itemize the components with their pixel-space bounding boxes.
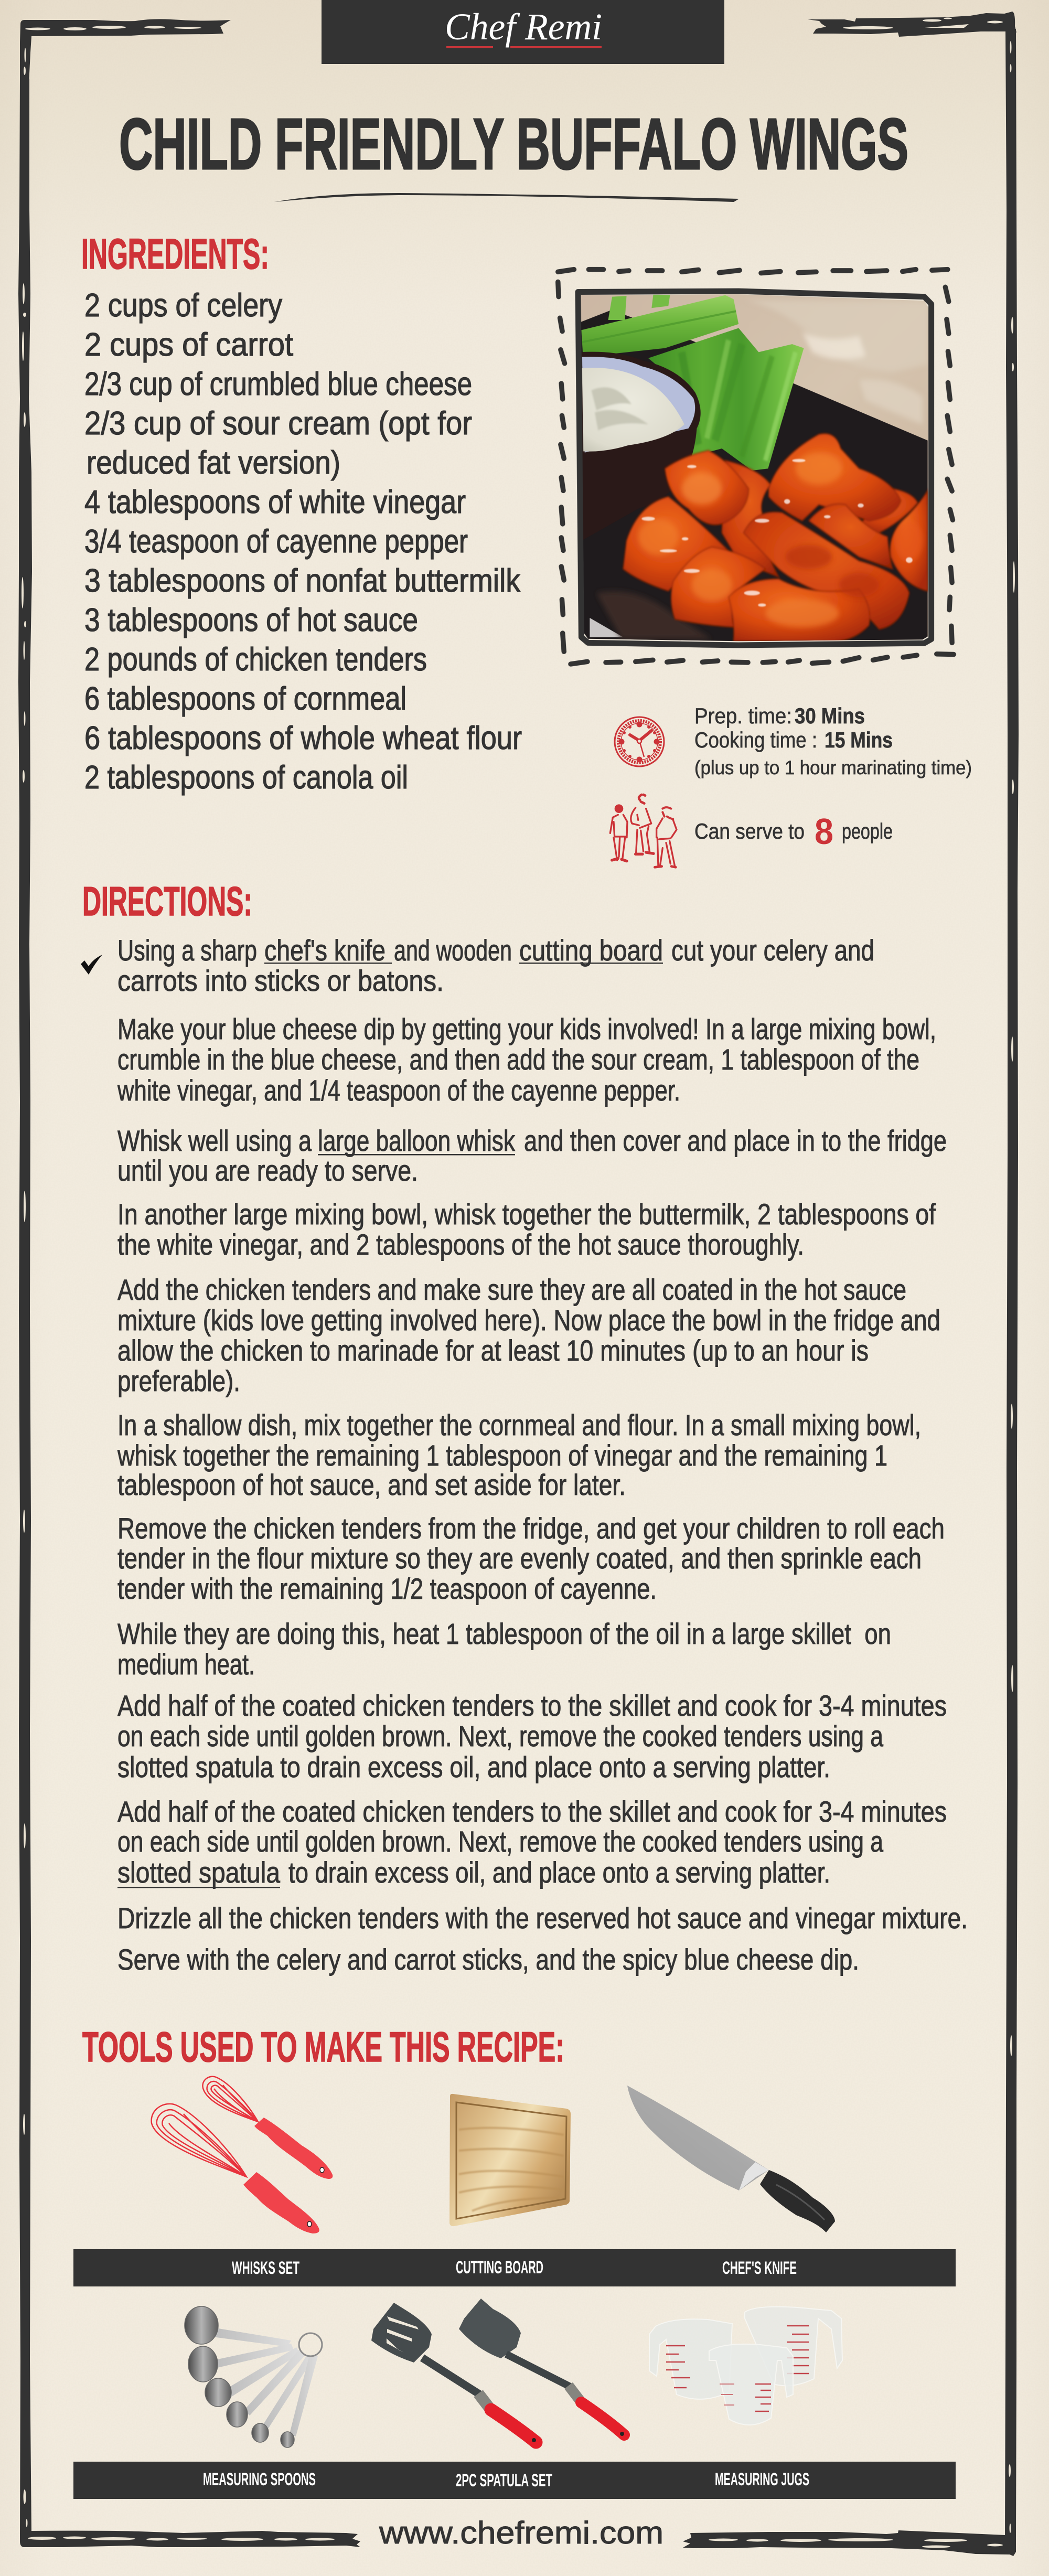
step: whisk: until you are ready to serve. [117,1154,418,1187]
wing: middle back [809,504,893,569]
dip bowl [580,352,701,541]
ingredients list: 3 tablespoons of hot sauce [84,602,418,638]
icon: check mark [81,955,102,975]
label bar: tools row two [73,2462,956,2499]
whisk one [202,2077,333,2179]
whisk two [152,2104,319,2233]
step: cut vegetables: chef's knife [264,934,386,967]
ingredients list [84,287,522,796]
solid spatula [459,2299,624,2436]
info: servings [610,795,893,867]
step: coating mix [117,1408,921,1501]
slotted spatula [371,2303,536,2442]
step: heat oil: While they are doing this, heat 1 tablespoon of the oil in a large skillet on [117,1617,891,1650]
tool: chef's knife [627,2086,835,2232]
ingredients list: 2 cups of carrot [84,327,293,363]
step: coating mix: tablespoon of hot sauce, and set aside for later. [117,1468,626,1501]
step: cut vegetables: carrots into sticks or batons. [117,964,444,997]
prep minutes: 30 Mins [795,703,865,728]
step: buttermilk [117,1198,936,1261]
wing: front bottom [729,579,870,642]
wing: left [623,497,729,591]
photo: buffalo wings with celery and dip [558,270,954,664]
step: coating mix: whisk together the remaining 1 tablespoon of vinegar and the remaining 1 [117,1439,887,1472]
dashed hand-drawn outline [558,270,954,664]
jug left [649,2319,732,2399]
label: spatula set: 2PC SPATULA SET [456,2471,552,2491]
wing: long drumette [744,512,909,629]
wings [623,434,928,642]
people word: people [842,819,893,843]
ingredients list: 2 cups of celery [84,287,282,324]
wing: back pieces [722,461,779,577]
step: cut vegetables: cut your celery and [671,934,874,967]
plate [581,310,928,643]
cooking time: Cooking time : [694,728,817,752]
border: right line [1005,29,1019,2539]
serves number: 8 [815,811,833,852]
marinating note: (plus up to 1 hour marinating time) [694,757,972,778]
logo text: Chef Remi: Chef Remi [445,6,602,48]
border: top-left stroke [20,19,231,84]
ingredients list: 4 tablespoons of white vinegar [84,484,466,520]
icon: three people [610,795,677,867]
dip [582,368,684,452]
step: cut vegetables: Using a sharp [117,934,257,967]
logo banner [322,0,724,64]
ingredients list: reduced fat version) [87,445,340,481]
step: blue cheese dip [117,1012,936,1107]
step: serve: Serve with the celery and carrot sticks, and the spicy blue cheese dip. [117,1943,859,1976]
step: whisk: Whisk well using a [117,1124,312,1157]
ingredients list: 6 tablespoons of cornmeal [84,681,406,717]
glaze highlights [641,459,913,607]
tool: measuring jugs [649,2307,842,2425]
step: heat oil: medium heat. [117,1648,255,1681]
step: marinate: preferable). [117,1364,240,1397]
logo underline [446,46,602,48]
tool: cutting board [449,2094,571,2226]
step: cook first half [117,1689,947,1783]
spoon handles [212,2328,318,2436]
cooking minutes: 15 Mins [825,728,893,752]
step: whisk: and then cover and place in to the fridge [524,1124,947,1157]
heading: tools: TOOLS USED TO MAKE THIS RECIPE: [82,2024,564,2071]
directions text [117,934,968,1976]
tool: spatula set [371,2299,624,2442]
title swash underline [274,193,739,202]
step: heat oil [117,1617,891,1681]
wing mottling [638,453,923,627]
spoon ring [299,2333,322,2356]
ingredients list: 3/4 teaspoon of cayenne pepper [84,523,468,560]
step: cook second half: slotted spatula [117,1856,281,1889]
ingredients list: 2/3 cup of sour cream (opt for [84,405,472,442]
jug back right [745,2307,842,2386]
border: bottom-left stroke [20,2531,360,2547]
ingredients list: 3 tablespoons of nonfat buttermilk [84,563,521,599]
step: cut vegetables: and wooden [394,934,512,967]
heading: ingredients: INGREDIENTS: [81,230,269,278]
step: buttermilk: the white vinegar, and 2 tablespoons of the hot sauce thoroughly. [117,1228,804,1261]
label: chef's knife: CHEF'S KNIFE [722,2258,797,2278]
tool: measuring spoons [185,2306,322,2447]
step: cook first half: slotted spatula to drain excess oil, and place onto a serving platter. [117,1750,830,1783]
step: whisk: large balloon whisk [318,1124,516,1157]
border: left line [18,79,32,2534]
label: measuring spoons: MEASURING SPOONS [203,2470,316,2489]
jug front [709,2344,793,2425]
wing: right pair [890,490,928,591]
prep time: Prep. time: [694,703,792,728]
label: whisks set: WHISKS SET [232,2258,299,2278]
serves text: Can serve to [694,819,805,843]
label bar: tools row one [73,2249,956,2286]
step: whisk [117,1124,947,1187]
heading: directions: DIRECTIONS: [82,878,252,924]
celery bundle [648,328,804,471]
celery back stalks [608,294,670,320]
step: cut vegetables [117,934,874,997]
wing: top left [665,451,748,525]
step: marinate: allow the chicken to marinade for at least 10 minutes (up to an hour is [117,1334,869,1367]
spoon bowls [185,2306,294,2447]
celery long stalk [581,295,738,357]
border: bottom-right stroke [683,2530,1016,2556]
border: top-right stroke [808,12,1016,37]
tool: whisks set [152,2077,333,2233]
ingredients list: 2 tablespoons of canola oil [84,760,408,796]
photo frame [578,291,932,645]
step: blue cheese dip: white vinegar, and 1/4 teaspoon of the cayenne pepper. [117,1074,680,1107]
step: coat tenders: tender with the remaining 1/2 teaspoon of cayenne. [117,1572,657,1605]
ingredients list: 2 pounds of chicken tenders [84,642,427,678]
step: cook second half: to drain excess oil, and place onto a serving platter. [288,1856,830,1889]
icon: clock [615,717,664,766]
wing: front centre [671,547,765,627]
label: cutting board: CUTTING BOARD [456,2258,543,2278]
step: coat tenders [117,1512,945,1605]
step: cook second half [117,1795,947,1889]
ingredients list: 6 tablespoons of whole wheat flour [84,720,522,756]
ingredients list: 2/3 cup of crumbled blue cheese [84,366,472,402]
info: preparation and cooking time [615,703,972,778]
label: measuring jugs: MEASURING JUGS [715,2470,809,2489]
photo contents [578,292,933,645]
step: cut vegetables: cutting board [519,934,663,967]
website footer: www.chefremi.com [379,2515,663,2550]
step: marinate [117,1273,940,1397]
wing: top right [769,434,901,521]
